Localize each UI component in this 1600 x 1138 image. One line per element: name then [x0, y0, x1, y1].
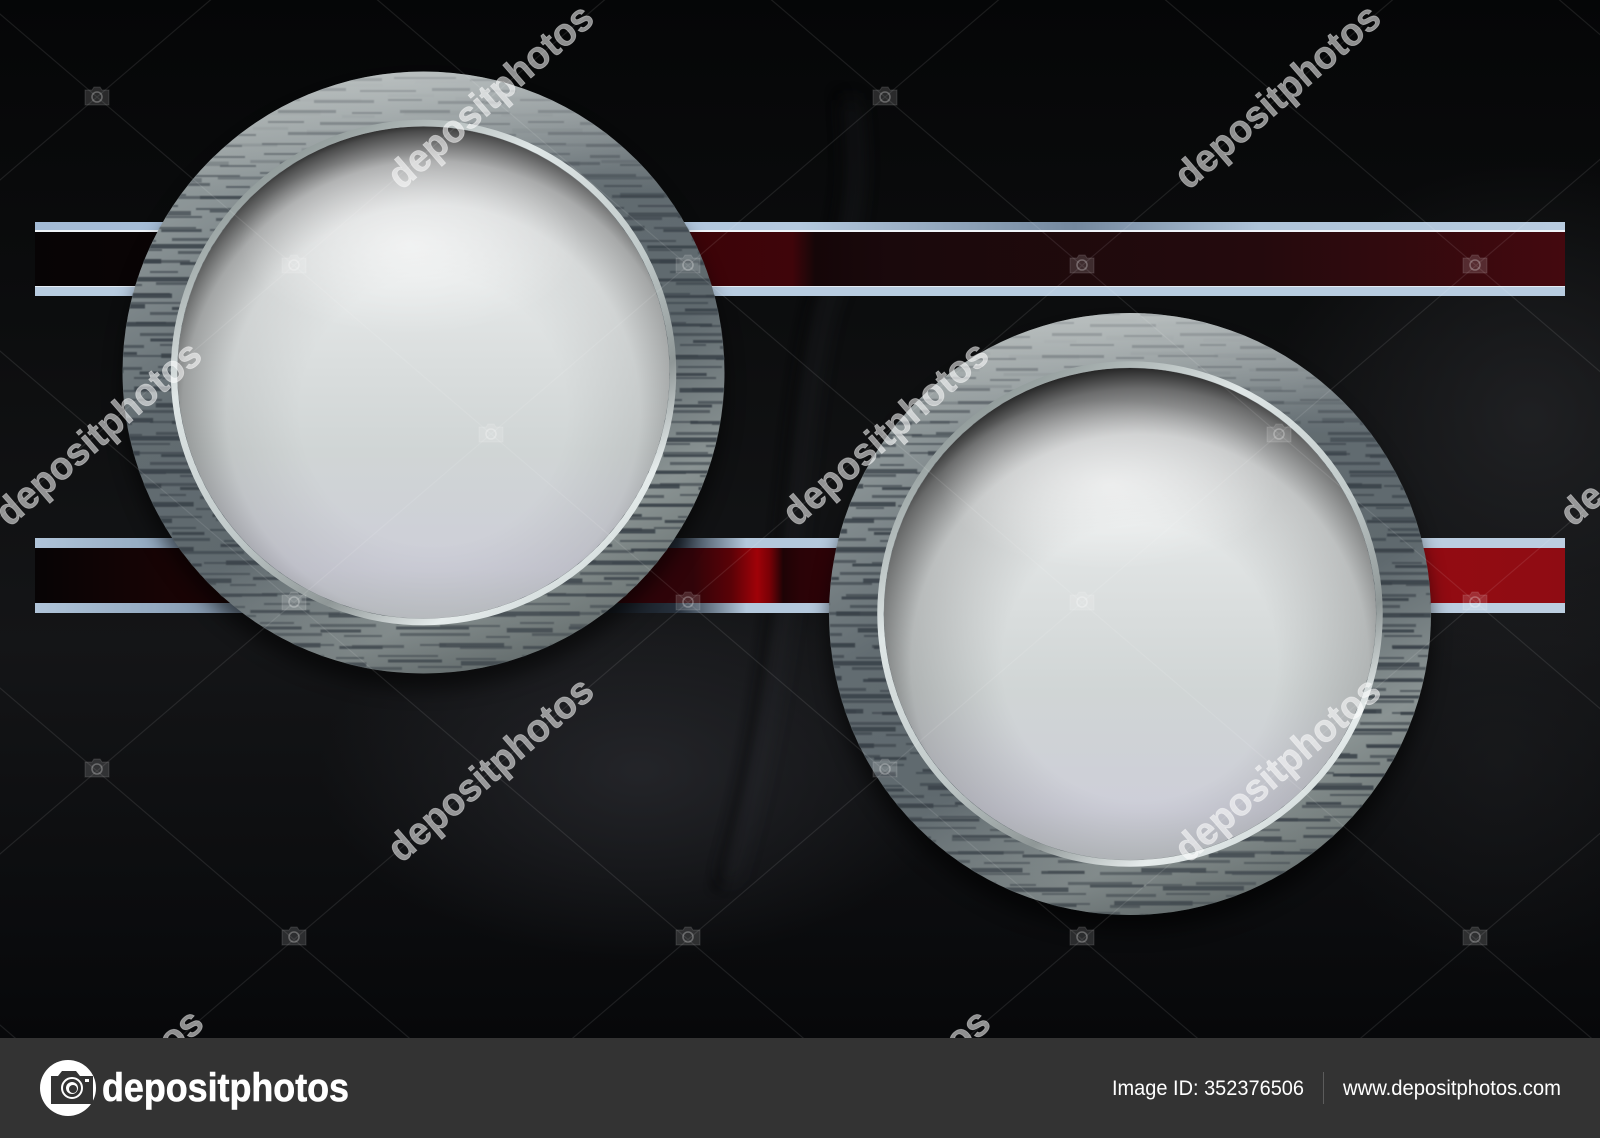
watermark text: depositphotos — [1166, 669, 1389, 870]
footer bar — [0, 1038, 1600, 1138]
logo wordmark: depositphotos — [102, 1066, 349, 1110]
website: www.depositphotos.com — [1342, 1077, 1561, 1100]
metal circle frame left — [122, 72, 724, 689]
watermark text: depositphotos — [774, 333, 997, 534]
watermark text: depositphotos — [379, 669, 602, 870]
image id: Image ID: 352376506 — [1112, 1077, 1304, 1100]
lower red band with silver stripes — [35, 538, 1565, 613]
white disc left — [178, 126, 670, 618]
watermark camera icons — [85, 87, 1487, 945]
icon: camera logo — [40, 1060, 96, 1116]
watermark text: os — [149, 1000, 212, 1063]
white disc right — [884, 368, 1376, 860]
upper red band with silver stripes — [35, 222, 1565, 296]
metal circle frame right — [829, 313, 1431, 931]
watermark text: os — [936, 1000, 999, 1063]
